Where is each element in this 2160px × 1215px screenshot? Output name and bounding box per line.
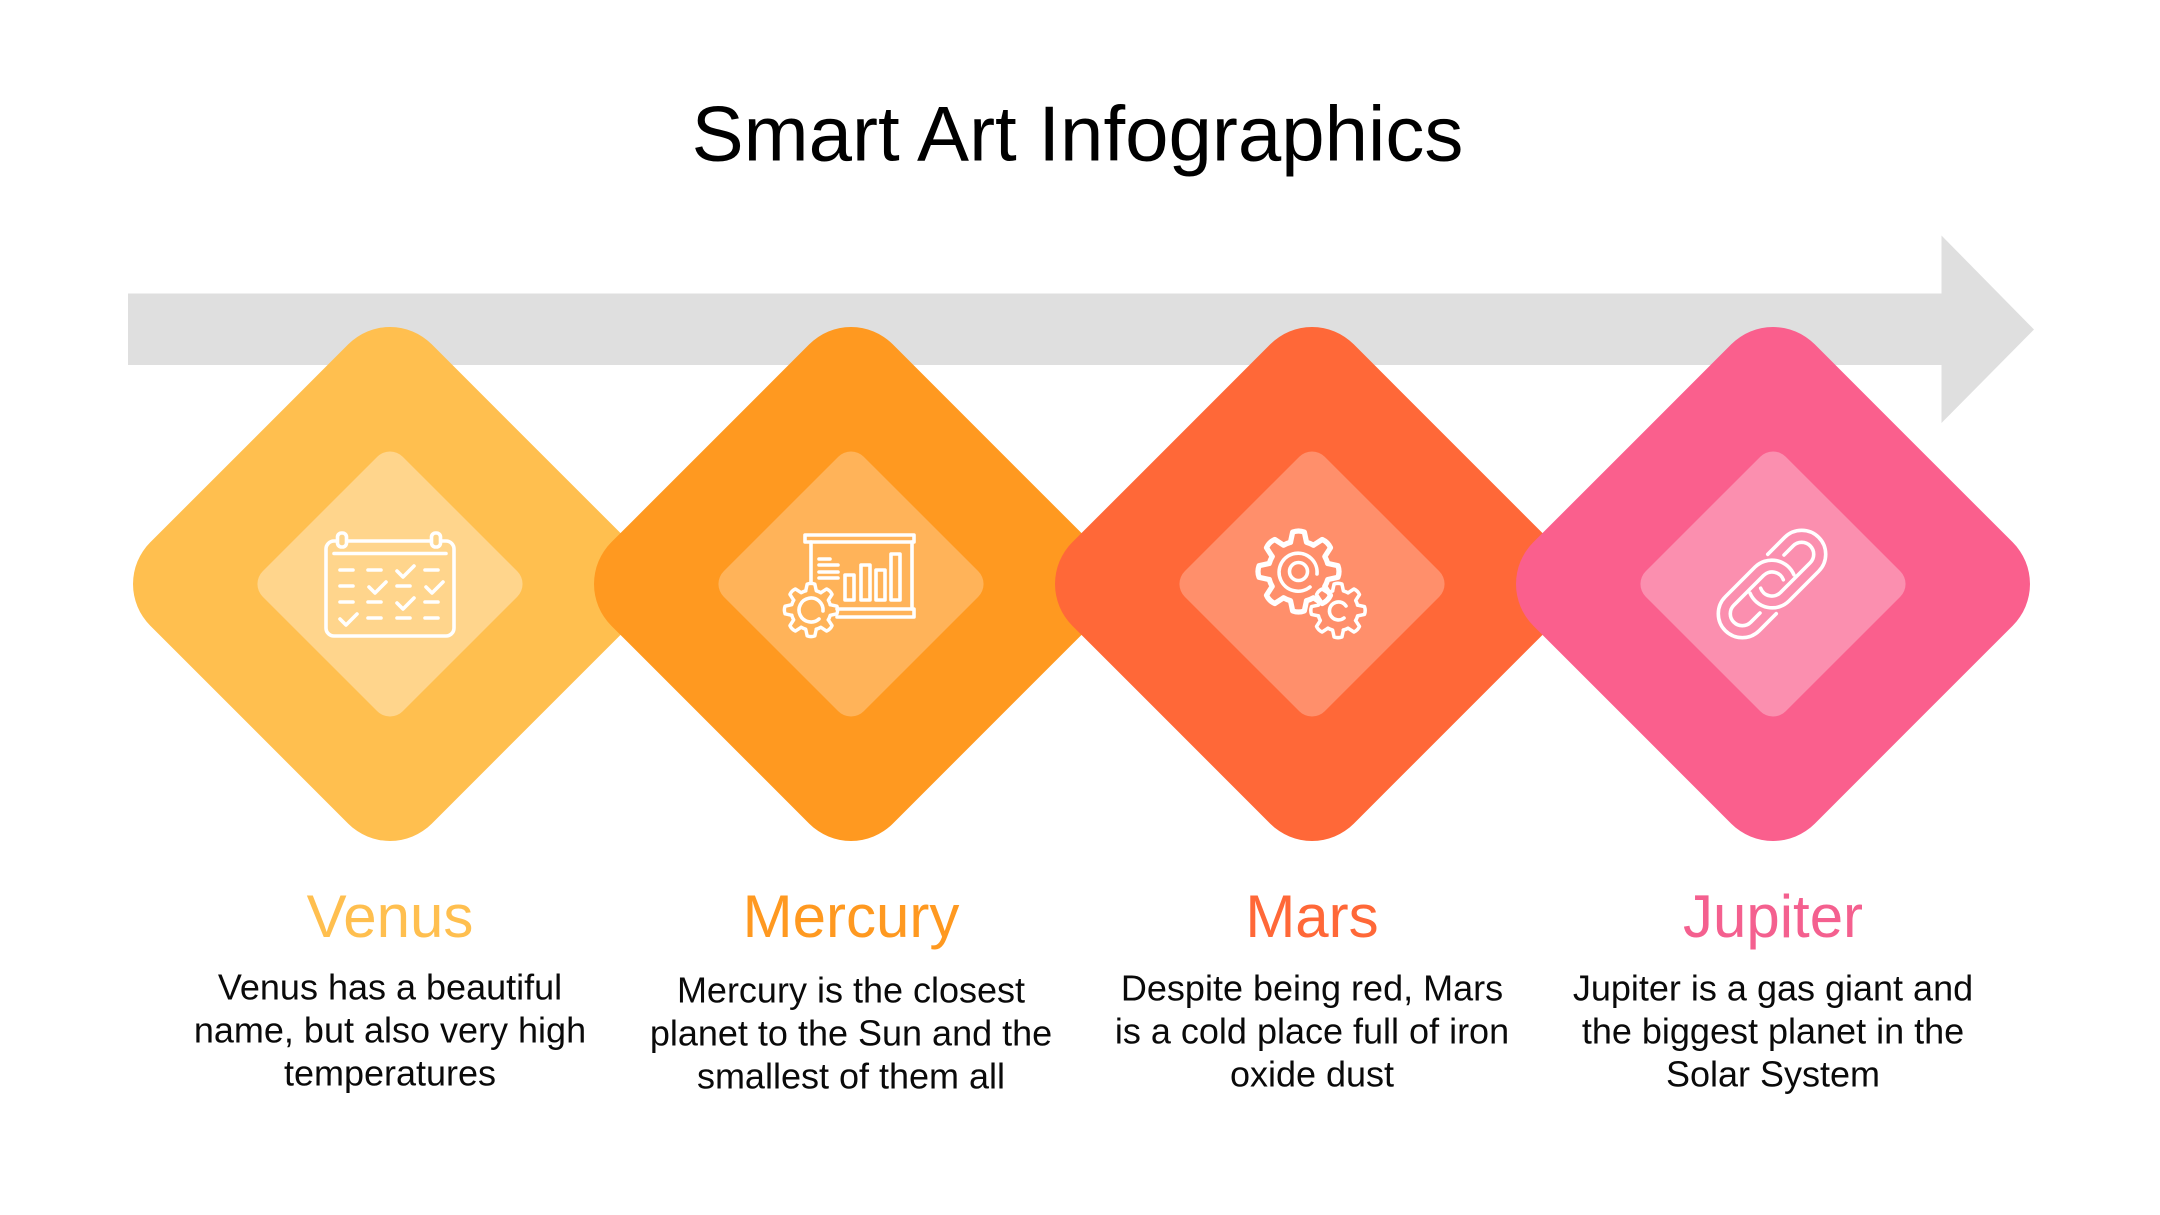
panel: Mars diamond <box>1031 303 1593 865</box>
icon: gears <box>1258 531 1365 638</box>
icon: presentation board with gear <box>784 535 914 637</box>
text block: Mercury <box>650 883 1052 1096</box>
icon: calendar <box>326 533 454 636</box>
text block: Venus <box>194 883 586 1094</box>
text block: Mercury: Mercury <box>743 883 959 950</box>
inner diamond: Mercury <box>711 444 991 724</box>
text block: Mars: is a cold place full of iron <box>1115 1010 1509 1052</box>
text block: Mars: oxide dust <box>1230 1054 1394 1094</box>
text block: Jupiter: Solar System <box>1666 1054 1880 1094</box>
text block: Jupiter: Jupiter <box>1683 883 1863 950</box>
text block: Mercury: Mercury is the closest <box>677 970 1025 1010</box>
text block: Venus: Venus <box>307 883 473 950</box>
inner diamond: Venus <box>250 444 530 724</box>
text block: Jupiter: the biggest planet in the <box>1582 1010 1964 1052</box>
text block: Venus: temperatures <box>284 1052 496 1094</box>
text block: Mars: Despite being red, Mars <box>1121 968 1503 1008</box>
panel: Venus diamond <box>109 303 671 865</box>
text block: Jupiter <box>1573 883 1973 1094</box>
title: Smart Art Infographics <box>692 90 1463 178</box>
text block: Mercury: planet to the Sun and the <box>650 1012 1052 1054</box>
text block: Mercury: smallest of them all <box>697 1056 1005 1096</box>
panel: Jupiter diamond <box>1492 303 2054 865</box>
text block: Venus: Venus has a beautiful <box>218 966 562 1008</box>
text block: Mars: Mars <box>1245 883 1379 950</box>
text block: Mars <box>1115 883 1509 1094</box>
inner diamond: Jupiter <box>1633 444 1913 724</box>
inner diamond: Mars <box>1172 444 1452 724</box>
text block: Venus: name, but also very high <box>194 1010 586 1050</box>
arrow: timeline <box>128 236 2034 423</box>
icon: chain link <box>1708 520 1836 648</box>
panel: Mercury diamond <box>570 303 1132 865</box>
text block: Jupiter: Jupiter is a gas giant and <box>1573 968 1973 1008</box>
